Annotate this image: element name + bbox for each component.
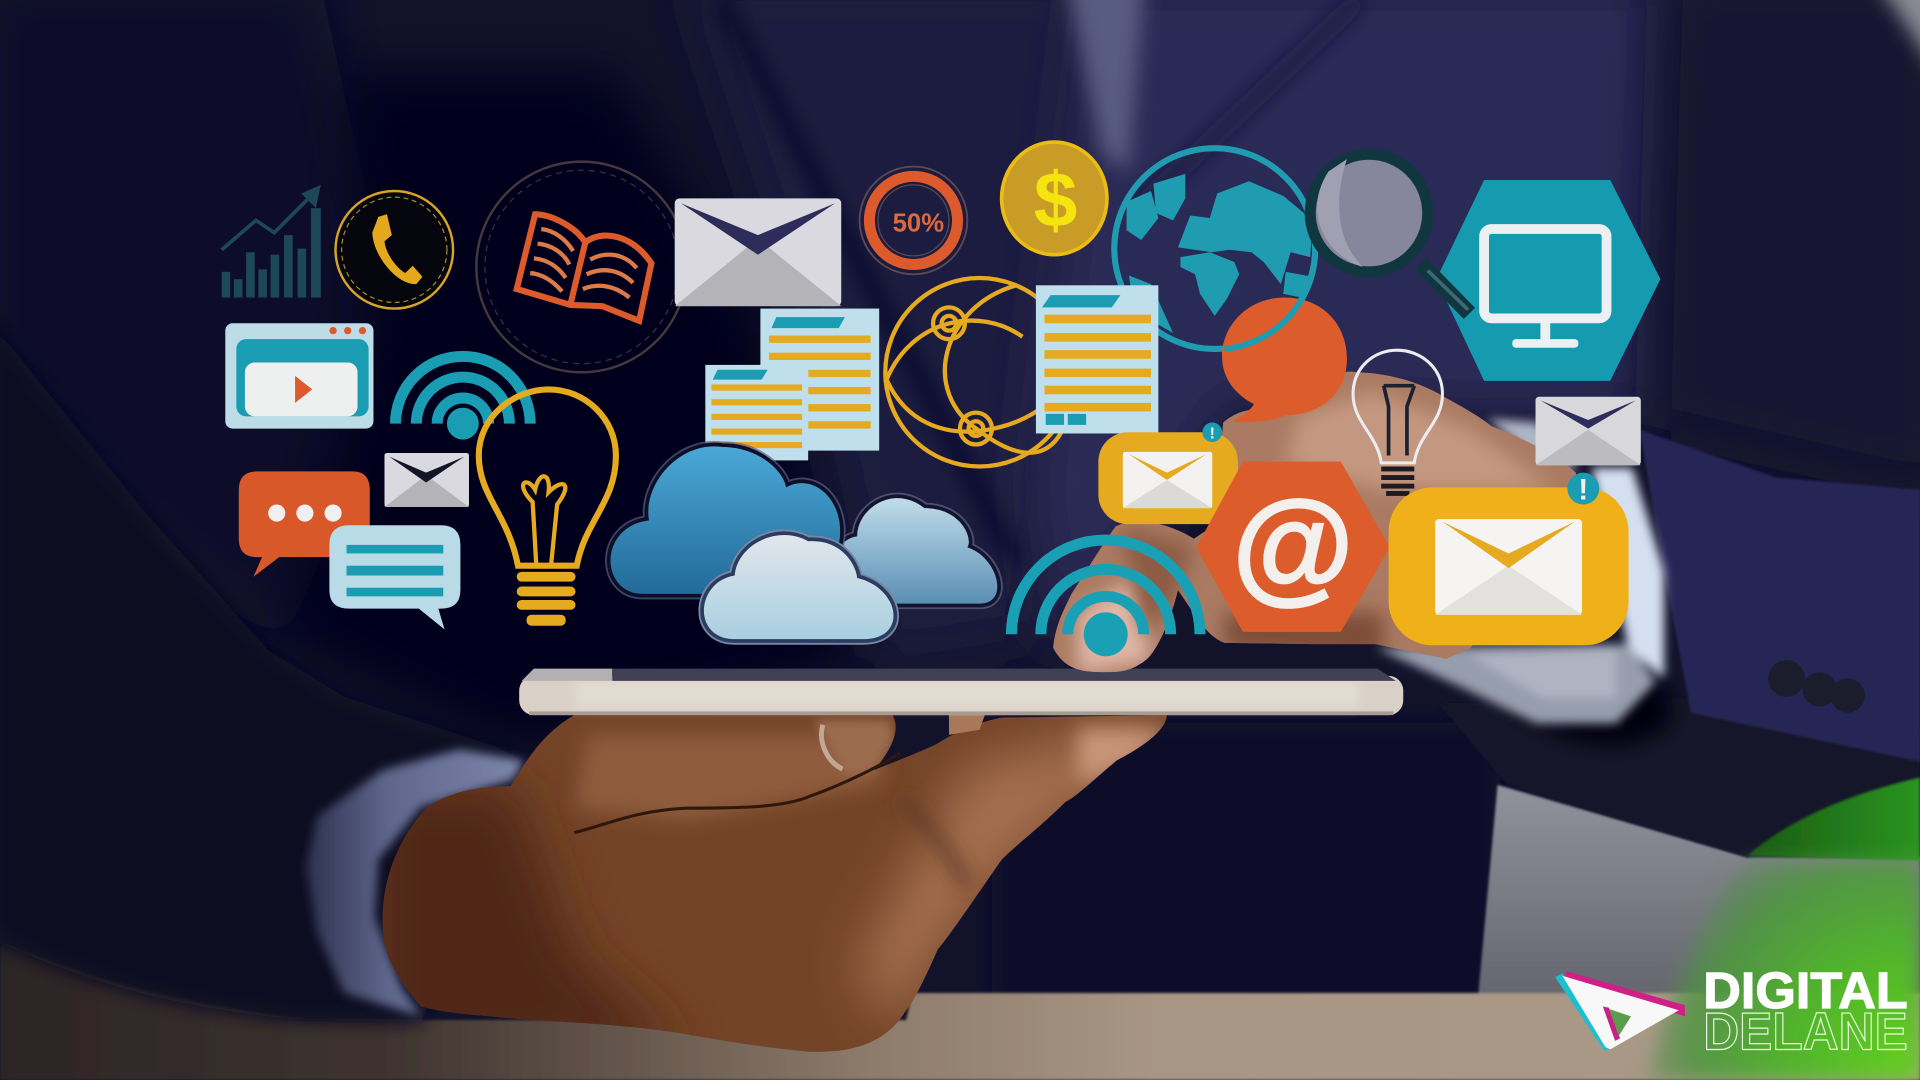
left sleeve bbox=[0, 318, 524, 1021]
icon: small mail badge: ! bbox=[1210, 425, 1215, 442]
icon: at-sign hexagon bbox=[1196, 462, 1390, 632]
icon: 50 percent gauge: 50% bbox=[893, 209, 944, 237]
icon: growth chart bbox=[222, 185, 321, 298]
icon: monitor hexagon bbox=[1436, 180, 1660, 381]
icon: small envelope bbox=[384, 453, 469, 507]
logo wordmark: DELANE bbox=[1703, 1002, 1908, 1061]
sleeve buttons bbox=[1768, 660, 1865, 713]
icon: right envelope bbox=[1536, 397, 1641, 465]
logo wordmark bbox=[1703, 961, 1908, 1061]
logo: Digital Delane bbox=[1555, 961, 1908, 1061]
icon: document right bbox=[1036, 285, 1158, 433]
icon: cloud large blue bbox=[611, 446, 840, 594]
icon: wifi left bbox=[396, 356, 530, 435]
icon: large envelope bbox=[675, 198, 841, 306]
icon: large mail badge: ! bbox=[1578, 474, 1588, 507]
icon: orange chat bubble bbox=[239, 471, 370, 577]
icon: orange speech balloon bbox=[1222, 298, 1347, 422]
right shirt cuff bbox=[1375, 419, 1664, 724]
icon: large mail badge bbox=[1389, 473, 1629, 645]
icon: small mail badge bbox=[1098, 422, 1238, 524]
right sleeve bbox=[1439, 430, 1920, 857]
icon: magnifying glass bbox=[1310, 154, 1469, 313]
logo arrow mark bbox=[1555, 971, 1685, 1051]
icon: outline bulb bbox=[1353, 350, 1442, 496]
icon: cloud back right bbox=[827, 498, 997, 604]
icon: dollar coin bbox=[1002, 142, 1107, 255]
tablet bbox=[519, 669, 1403, 715]
logo wordmark: DIGITAL bbox=[1703, 961, 1908, 1019]
icon: globe rim over balloon bbox=[1224, 255, 1315, 349]
icon: world globe bbox=[1114, 148, 1315, 349]
icon: light chat bubble bbox=[329, 525, 460, 629]
icon: 50 percent gauge bbox=[860, 167, 967, 274]
left shirt cuff bbox=[306, 749, 524, 1016]
icon: phone bbox=[336, 191, 453, 309]
green brand corner bbox=[1647, 778, 1920, 1080]
icon: document front bbox=[705, 365, 808, 460]
icon: document back bbox=[760, 309, 879, 451]
icon: open book bbox=[476, 162, 687, 372]
icon: light bulb bbox=[479, 389, 616, 626]
icon: at-sign hexagon: @ bbox=[1232, 476, 1354, 615]
holding hand bbox=[367, 710, 1176, 1065]
icon: dollar coin: $ bbox=[1034, 156, 1077, 244]
icon: wifi right bbox=[1011, 540, 1200, 656]
icon: video player bbox=[225, 323, 373, 429]
pointing hand bbox=[1053, 372, 1576, 672]
icon: network globe bbox=[885, 278, 1074, 467]
background: table bbox=[0, 943, 1920, 1080]
background: wall bbox=[1478, 785, 1920, 998]
icon: cloud front bbox=[704, 535, 893, 639]
